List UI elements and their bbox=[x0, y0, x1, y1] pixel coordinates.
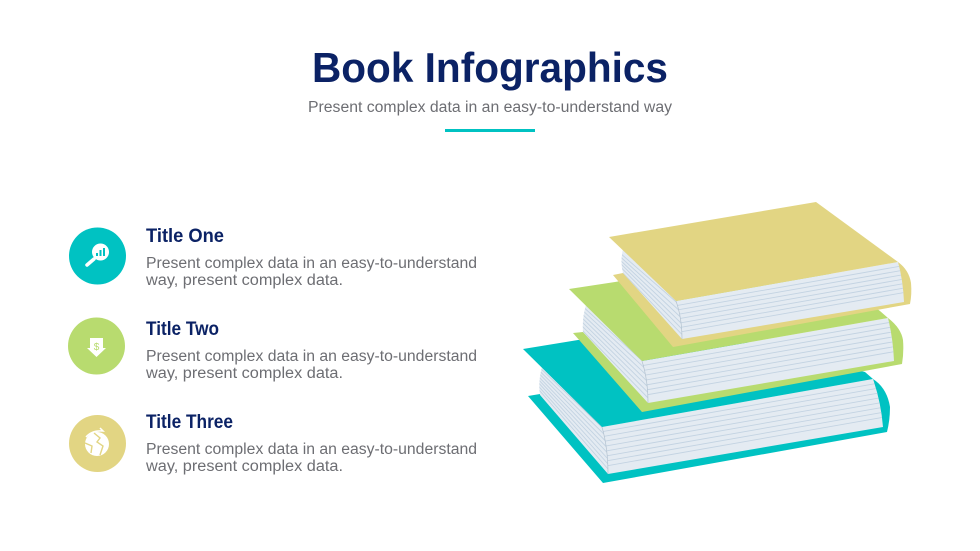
text block: description three bbox=[145, 441, 477, 475]
icon: down arrow with dollar sign: $ bbox=[94, 342, 100, 353]
illustration: stack of books bbox=[523, 202, 911, 483]
heading: title one: Title One bbox=[146, 226, 224, 247]
item three bbox=[69, 412, 477, 475]
icon: globe with arrow bbox=[69, 415, 126, 472]
text block: description one: Present complex data in an easy-to-understand bbox=[146, 255, 477, 272]
item one bbox=[69, 226, 477, 289]
book: bottom teal bbox=[523, 330, 890, 483]
item two bbox=[68, 318, 477, 382]
text block: description one: way, present complex data. bbox=[145, 272, 343, 289]
subtitle: Present complex data in an easy-to-understand way bbox=[308, 99, 672, 116]
text block: description two bbox=[145, 348, 477, 382]
text block: description two: way, present complex data. bbox=[145, 365, 343, 382]
text block: description three: way, present complex data. bbox=[145, 458, 343, 475]
book: top yellow bbox=[609, 202, 911, 347]
icon: down arrow with dollar sign bbox=[68, 318, 125, 374]
text block: description three: Present complex data in an easy-to-understand bbox=[146, 441, 477, 458]
text block: description two: Present complex data in an easy-to-understand bbox=[146, 348, 477, 365]
text block: description one bbox=[145, 255, 477, 289]
heading: title three: Title Three bbox=[146, 412, 233, 433]
title underline accent bbox=[445, 129, 535, 132]
heading: title two: Title Two bbox=[146, 319, 219, 340]
title: Book Infographics bbox=[312, 44, 668, 91]
book: middle green bbox=[569, 274, 904, 412]
icon: magnifier with bar chart bbox=[69, 228, 126, 284]
